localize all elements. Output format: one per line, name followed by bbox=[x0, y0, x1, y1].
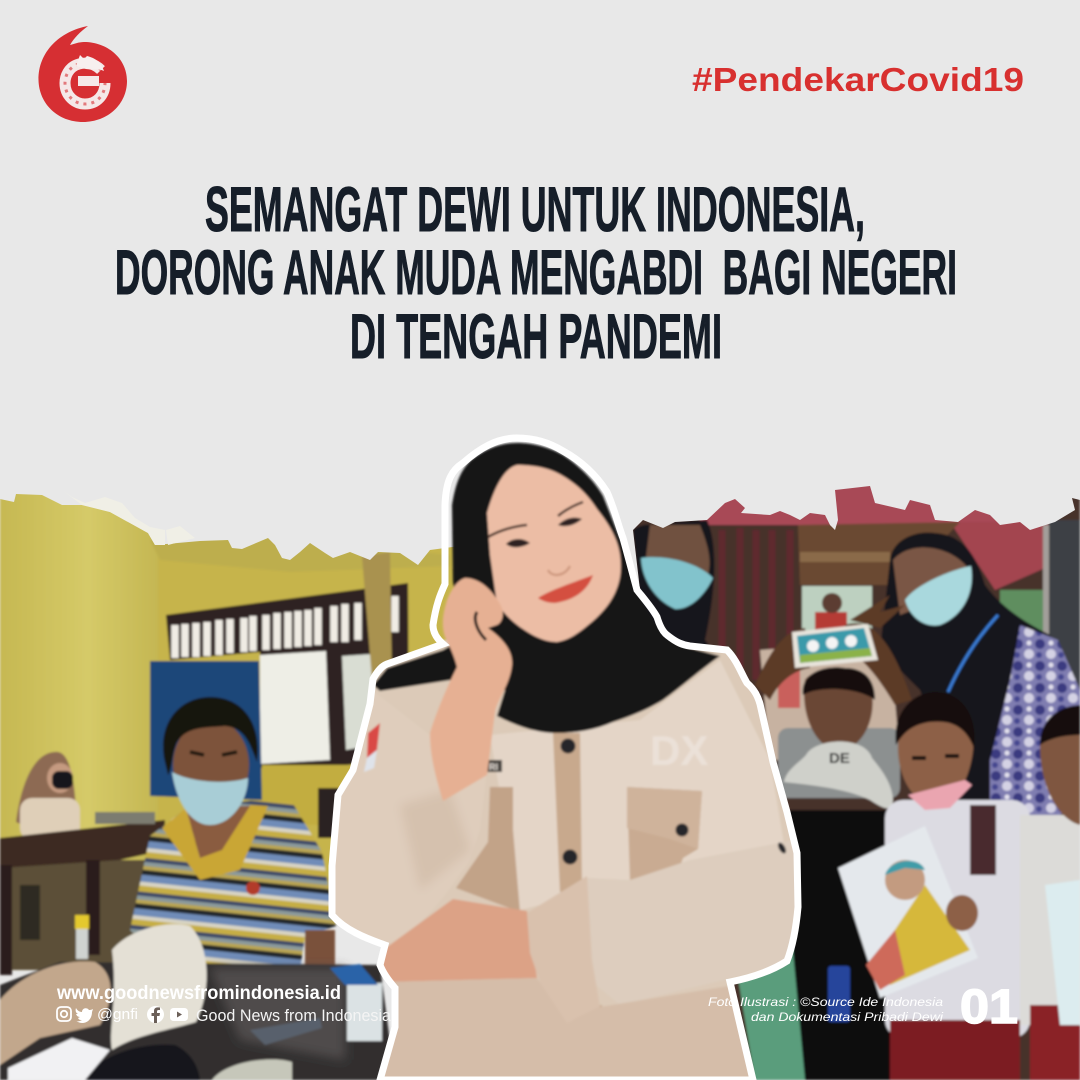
placket bbox=[553, 733, 582, 892]
flag patch lower bbox=[364, 750, 377, 772]
name tag: RI bbox=[489, 762, 498, 772]
photo: clinic room (left) bbox=[0, 480, 458, 1080]
shirt body bbox=[325, 640, 805, 1080]
icon: instagram bbox=[57, 1007, 71, 1021]
website url: www.goodnewsfromindonesia.id bbox=[56, 983, 341, 1004]
corridor base bbox=[620, 480, 1080, 1080]
veiled child: DE bbox=[829, 750, 850, 767]
nose shadow bbox=[548, 566, 570, 575]
device bbox=[212, 1059, 292, 1080]
logo: GNFI red swirl bbox=[38, 26, 127, 122]
title: DI TENGAH PANDEMI bbox=[350, 302, 722, 372]
boy's hand on drawing bbox=[946, 895, 978, 931]
lower shirt bbox=[380, 978, 753, 1080]
distant greenery bbox=[802, 586, 872, 636]
photo: children and volunteers (right) bbox=[620, 480, 1080, 1080]
flag patch bbox=[367, 723, 380, 758]
photo credit: Foto Ilustrasi : ©Source Ide Indonesia bbox=[708, 995, 943, 1009]
eyebrows bbox=[488, 502, 583, 537]
title bbox=[115, 175, 957, 372]
left sleeve bbox=[333, 690, 487, 948]
lower wall right bbox=[260, 763, 350, 824]
masked woman right bbox=[880, 532, 1080, 830]
raised arms bbox=[755, 595, 912, 705]
eyes bbox=[506, 518, 582, 547]
dark post bbox=[1047, 520, 1080, 686]
ceiling shadow strip bbox=[152, 538, 442, 570]
yellow side wall bbox=[0, 480, 160, 880]
logo: G ring bbox=[65, 63, 105, 104]
ceiling bbox=[798, 522, 960, 585]
photo credit bbox=[708, 995, 943, 1024]
logo: G bar bbox=[78, 76, 99, 86]
window transom frame bbox=[166, 583, 409, 768]
main figure: Dewi bbox=[325, 438, 805, 1080]
finger gap bbox=[475, 612, 486, 640]
distant child bbox=[815, 593, 847, 632]
boy far right bbox=[1020, 705, 1080, 1080]
corridor columns bbox=[722, 528, 790, 690]
right pocket bbox=[627, 787, 702, 880]
boy under box bbox=[778, 667, 900, 798]
right sleeve bbox=[578, 840, 798, 1005]
DX chest logo: DX bbox=[650, 727, 708, 774]
photo credit: dan Dokumentasi Pribadi Dewi bbox=[751, 1010, 943, 1024]
logo: eagle head bbox=[76, 55, 104, 71]
far right paper bbox=[1045, 880, 1080, 1025]
white sticker outline bbox=[332, 438, 798, 1080]
left sleeve fold bbox=[400, 790, 470, 890]
shirt light torso bbox=[490, 660, 790, 910]
white hat bbox=[784, 742, 893, 808]
cuff bbox=[527, 876, 600, 1023]
window panes bbox=[260, 651, 330, 764]
hashtag: #PendekarCovid19 bbox=[692, 61, 1024, 98]
face bbox=[487, 465, 621, 642]
icon: twitter bbox=[76, 1008, 93, 1023]
black sleeve bbox=[80, 1045, 200, 1080]
seated man bbox=[130, 697, 336, 970]
white glove bbox=[111, 924, 207, 1050]
room under table bbox=[10, 858, 146, 972]
lips bbox=[538, 575, 593, 603]
left pocket bbox=[456, 787, 520, 912]
hello kitty pencil box bbox=[792, 624, 878, 668]
forearm skin bbox=[380, 899, 537, 982]
icon: facebook bbox=[147, 1006, 164, 1023]
handle: @gnfi bbox=[97, 1006, 138, 1023]
page number: 01 bbox=[960, 981, 1018, 1034]
name tag bbox=[487, 760, 502, 772]
veiled child bbox=[735, 742, 895, 1080]
boy in white shirt bbox=[885, 692, 1030, 1080]
gloved hand left bbox=[0, 961, 111, 1065]
logo: ring texture bbox=[65, 63, 105, 104]
page name: Good News from Indonesia bbox=[196, 1007, 392, 1025]
blue board bbox=[150, 661, 262, 800]
torn paper highlights bbox=[62, 490, 195, 545]
right green bbox=[998, 588, 1044, 632]
raised hand and arm bbox=[430, 578, 512, 801]
hijab bbox=[373, 443, 720, 733]
child's drawing bbox=[838, 826, 978, 998]
bamboo post bbox=[362, 552, 392, 680]
buttons bbox=[560, 738, 788, 864]
wooden table bbox=[0, 788, 340, 975]
window transom bars bbox=[175, 596, 395, 658]
paper bbox=[8, 1038, 110, 1080]
pale floor bbox=[760, 640, 900, 760]
table with supplies bbox=[0, 962, 395, 1080]
small bottle bbox=[75, 915, 89, 959]
red roof bbox=[700, 485, 1050, 525]
masked woman behind bbox=[633, 520, 715, 644]
icon: youtube bbox=[170, 1008, 188, 1021]
distant kids in red and white bbox=[778, 668, 800, 708]
medicine box bbox=[330, 964, 382, 1041]
background woman bbox=[16, 752, 80, 840]
yellow back wall bbox=[158, 530, 458, 900]
